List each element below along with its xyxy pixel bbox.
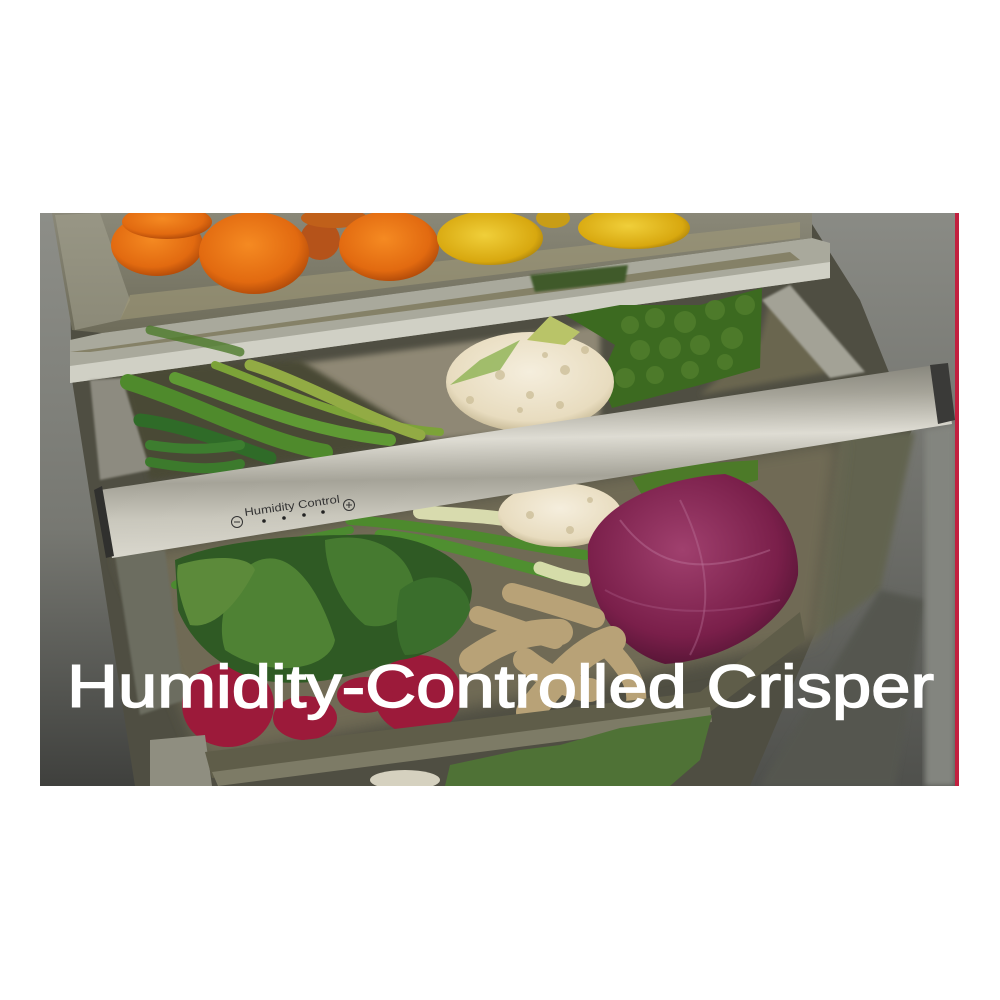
crisper drawer front bar bbox=[94, 363, 955, 558]
artichoke and greens below bbox=[370, 715, 712, 790]
plus button bbox=[344, 500, 354, 510]
lemons bbox=[437, 207, 690, 292]
minus button bbox=[232, 516, 242, 528]
rear crisper wall bbox=[290, 325, 600, 440]
humidity control label bbox=[232, 494, 354, 528]
cauliflower bbox=[446, 316, 622, 547]
photo: refrigerator crisper interior bbox=[40, 205, 959, 790]
chard leaves bbox=[175, 534, 472, 683]
left wall bbox=[40, 213, 135, 786]
ginger root bbox=[472, 593, 636, 712]
humidity control label: Humidity Control bbox=[244, 494, 340, 519]
drawer interior below bar bbox=[120, 440, 840, 760]
green onions bbox=[128, 330, 585, 585]
fridge interior background bbox=[70, 224, 912, 786]
lower shelf edge bbox=[150, 612, 805, 786]
red edge bbox=[955, 213, 959, 786]
radishes bbox=[182, 655, 462, 747]
right ribbed rail bbox=[762, 285, 865, 378]
red cabbage bbox=[588, 474, 798, 664]
left ribbed rail bbox=[90, 378, 150, 480]
kale behind cauliflower bbox=[565, 288, 762, 500]
right wall bbox=[750, 213, 955, 786]
title: Humidity-Controlled Crisper bbox=[67, 653, 934, 720]
upper shelf glass and tray bbox=[52, 213, 830, 383]
oranges bbox=[111, 205, 439, 294]
